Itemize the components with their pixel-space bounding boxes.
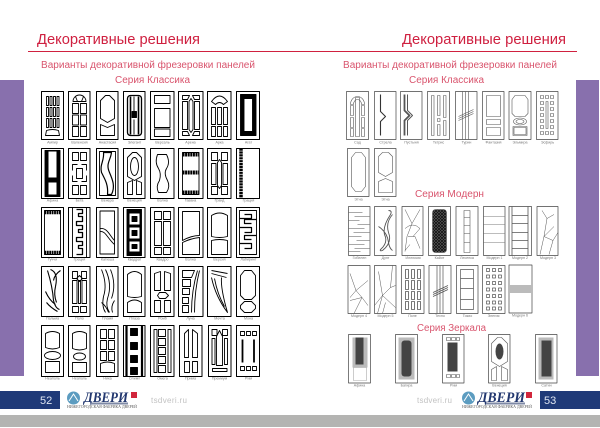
door: Луна: [178, 266, 203, 320]
series heading: Modern: Серия Модерн: [415, 189, 484, 200]
logo: right: [462, 390, 532, 409]
door: Гуччи: [42, 208, 64, 262]
door: Неаполь 1: Неаполь: [45, 376, 60, 380]
door: Квадрат: [124, 208, 145, 262]
door: Плаза: Плаза: [129, 316, 140, 320]
door: Модерн 3: Модерн 3: [540, 256, 556, 260]
series heading: right Classic: Серия Классика: [409, 75, 484, 86]
door: Дуэт: Дуэт: [382, 256, 390, 260]
door: Гуччи: Гуччи: [48, 258, 57, 262]
door: Мона: [236, 266, 260, 320]
header rule: [28, 51, 577, 52]
door: Модерн 6: [509, 265, 532, 318]
door: Элегия: Элегия: [488, 314, 499, 318]
website: left: tsdveri.ru: [151, 396, 187, 405]
door: Версаль: [150, 92, 174, 144]
door: Волна-2: [178, 208, 203, 262]
door: Фантазия: [482, 92, 504, 144]
door: Дуэт: [374, 206, 396, 260]
door: Техно: [429, 266, 451, 318]
door: Гавана: [178, 148, 203, 202]
logo: left: ДВЕРИ: [82, 390, 129, 406]
door: Валенсия: Валенсия: [71, 140, 88, 144]
door: Венеция: Венеция: [127, 198, 142, 202]
door: Модерн 4: [348, 266, 370, 318]
door: Гранд: Гранд: [215, 198, 225, 202]
door: Анастасия: [96, 92, 118, 144]
door: Лесенка: [456, 206, 478, 260]
door: Луна: Луна: [186, 316, 195, 320]
door: Турин: Турин: [462, 140, 471, 144]
door: Элегия: [482, 266, 505, 318]
mirror door: Багира: [396, 334, 418, 388]
right purple side bar: [576, 80, 599, 376]
door: Пламя: [96, 266, 118, 320]
series heading: Mirrors: Серия Зеркала: [417, 323, 486, 334]
mirror door: Рим: Рим: [450, 384, 457, 388]
mirror door: Багира: Багира: [401, 384, 412, 388]
door: Плаза: [124, 266, 145, 320]
door: Лабиринт: [236, 208, 260, 262]
mirror door: Рим: [442, 334, 464, 388]
subtitle: left page: Варианты декоративной фрезеровки панелей: [41, 59, 255, 71]
door: Грация: [236, 148, 260, 202]
heading: left page: Декоративные решения: [37, 31, 200, 48]
door: Волна: Волна: [157, 198, 168, 202]
door: Токио: [456, 266, 478, 318]
door: Прима: [180, 326, 202, 380]
door: Омега: [150, 326, 174, 380]
mirror door: Афина: Афина: [354, 384, 365, 388]
logo: right: ДВЕРИ: [476, 390, 526, 406]
door: Иллюзия: [402, 206, 423, 260]
door: Волна-2: Волна: [185, 258, 196, 262]
website: right: tsdveri.ru: [417, 396, 452, 405]
door: Арена: [178, 92, 203, 144]
door: Греция: [68, 208, 90, 262]
door: Гобелен: Гобелен: [353, 256, 366, 260]
door: Модерн 5: Модерн 5: [377, 314, 394, 318]
door: Тетрис: [428, 92, 450, 144]
door: Квадрат: Квадрат: [128, 258, 142, 262]
door: Неаполь 2: Неаполь: [72, 376, 87, 380]
door: Катюша: Катюша: [101, 258, 114, 262]
door: Модерн 3: [537, 206, 558, 260]
door: Мечта: [208, 266, 231, 320]
door: Неаполь 2: [68, 326, 90, 380]
door: Агат: Агат: [245, 140, 252, 144]
door: Агат: [236, 92, 260, 144]
door: Неаполь 1: [42, 326, 64, 380]
door: Модерн 2: Модерн 2: [512, 256, 528, 260]
door: Кайот: Кайот: [435, 256, 445, 260]
door: Версаль: Версаль: [155, 140, 170, 144]
door: Катюша: [96, 208, 118, 262]
door: Иллюзия: Иллюзия: [405, 256, 421, 260]
door grid: left page Classic series: [42, 92, 260, 380]
door: Рим: Рим: [245, 376, 252, 380]
door: Ампир: Ампир: [47, 140, 58, 144]
door: Турин: [456, 92, 477, 144]
door: Бета: Бета: [76, 198, 83, 202]
door: Рим: [236, 326, 260, 380]
door: Этна 1: Этна: [354, 198, 363, 202]
door: Греция: Греция: [74, 258, 85, 262]
door: Модерн 2: [509, 206, 532, 260]
door: Поло: [68, 266, 90, 320]
door: Квадро: [150, 208, 174, 262]
page number 53: 53: [544, 395, 556, 407]
door: Сад: [346, 92, 368, 144]
door: Венеция: [124, 148, 145, 202]
door: Стрела: Стрела: [379, 140, 392, 144]
door: Олимп: [124, 326, 145, 380]
door: Эсфирь: [536, 92, 558, 144]
door: Гранд: [208, 148, 231, 202]
logo: right: НИЖЕГОРОДСКАЯ ФАБРИКА ДВЕРЕЙ: [462, 404, 532, 409]
door: Олимп: Олимп: [129, 376, 140, 380]
mirror door: Сатин: Сатин: [541, 384, 552, 388]
door: Элегант: Элегант: [128, 140, 142, 144]
subtitle: right page: Варианты декоративной фрезеровки панелей: [343, 59, 557, 71]
mirror door: Венеция: [488, 334, 510, 388]
door: Поло: Поло: [75, 316, 84, 320]
door: Этна 2: Этна: [381, 198, 390, 202]
door: Стрела: [374, 92, 396, 144]
door: Валенсия: [68, 92, 90, 144]
door: Поле: [402, 266, 424, 318]
door: Пальма: Пальма: [46, 316, 59, 320]
door: Модерн 5: [374, 266, 396, 318]
logo: left: НИЖЕГОРОДСКАЯ ФАБРИКА ДВЕРЕЙ: [67, 404, 137, 409]
logo: left: [67, 390, 137, 409]
door: Афина: [42, 148, 64, 202]
door: Квадро: Квадро: [156, 258, 169, 262]
mirror door: Афина: [348, 334, 370, 388]
door: Техно: Техно: [435, 314, 445, 318]
door: Пустыня: Пустыня: [404, 140, 419, 144]
door: Премиум: Премиум: [212, 376, 228, 380]
door: Лесенка: Лесенка: [460, 256, 474, 260]
door: Пустыня: [400, 92, 422, 144]
page number 53: [540, 391, 600, 409]
door: Бета: [68, 148, 90, 202]
page number 52: [0, 391, 60, 409]
door: Мечта: Мечта: [214, 316, 225, 320]
door: Этна 2: [374, 148, 396, 202]
door: Пламя: Пламя: [102, 316, 113, 320]
door: Гавана: Гавана: [185, 198, 196, 202]
door: Этна 1: [348, 148, 369, 202]
left purple side bar: [0, 80, 24, 376]
door: Модерн 1: Модерн 1: [486, 256, 503, 260]
door: Мона: Мона: [244, 316, 253, 320]
door: Поле: Поле: [408, 314, 417, 318]
door: Фантазия: Фантазия: [486, 140, 501, 144]
door: Ника: Ника: [103, 376, 112, 380]
door: Элегант: [124, 92, 145, 144]
heading: right page: Декоративные решения: [402, 31, 566, 48]
door: Арка: Арка: [215, 140, 224, 144]
door: Грация: Грация: [243, 198, 254, 202]
door: Венера: Венера: [101, 198, 114, 202]
door: Премиум: [208, 326, 231, 380]
door grid: right page series: [346, 92, 558, 388]
door: Ромб: Ромб: [158, 316, 167, 320]
door: Модерн 4: Модерн 4: [351, 314, 367, 318]
door: Кайот: [428, 206, 450, 260]
door: Арка: [208, 92, 231, 144]
door: Сад: Сад: [354, 140, 362, 144]
door: Омега: Омега: [157, 376, 168, 380]
door: Тетрис: Тетрис: [433, 140, 444, 144]
door: Венера: [96, 148, 118, 202]
door: Ампир: [42, 92, 64, 144]
mirror door: Сатин: [536, 334, 557, 388]
door: Анастасия: Анастасия: [99, 140, 116, 144]
mirror door: Венеция: Венеция: [492, 384, 507, 388]
door: Модерн 6: Модерн 6: [512, 314, 528, 318]
door: Ника: [96, 326, 118, 380]
door: Эльмира: [509, 92, 531, 144]
door: Лабиринт: Лабиринт: [240, 258, 257, 262]
bottom grey band: [0, 415, 600, 427]
door: Эсфирь: Эсфирь: [541, 140, 554, 144]
door: Афина: Афина: [47, 198, 58, 202]
door: Прима: Прима: [185, 376, 196, 380]
door: Версия: [208, 208, 231, 262]
door: Волна: [150, 148, 174, 202]
door: Версия: Версия: [213, 258, 226, 262]
door: Модерн 1: [484, 206, 505, 260]
door: Ромб: [150, 266, 174, 320]
door: Пальма: [42, 266, 64, 320]
page number 52: 52: [40, 395, 52, 407]
series heading: left Classic: Серия Классика: [115, 75, 190, 86]
door: Арена: Арена: [185, 140, 196, 144]
door: Токио: Токио: [463, 314, 472, 318]
door: Гобелен: [348, 206, 370, 260]
door: Эльмира: Эльмира: [513, 140, 527, 144]
